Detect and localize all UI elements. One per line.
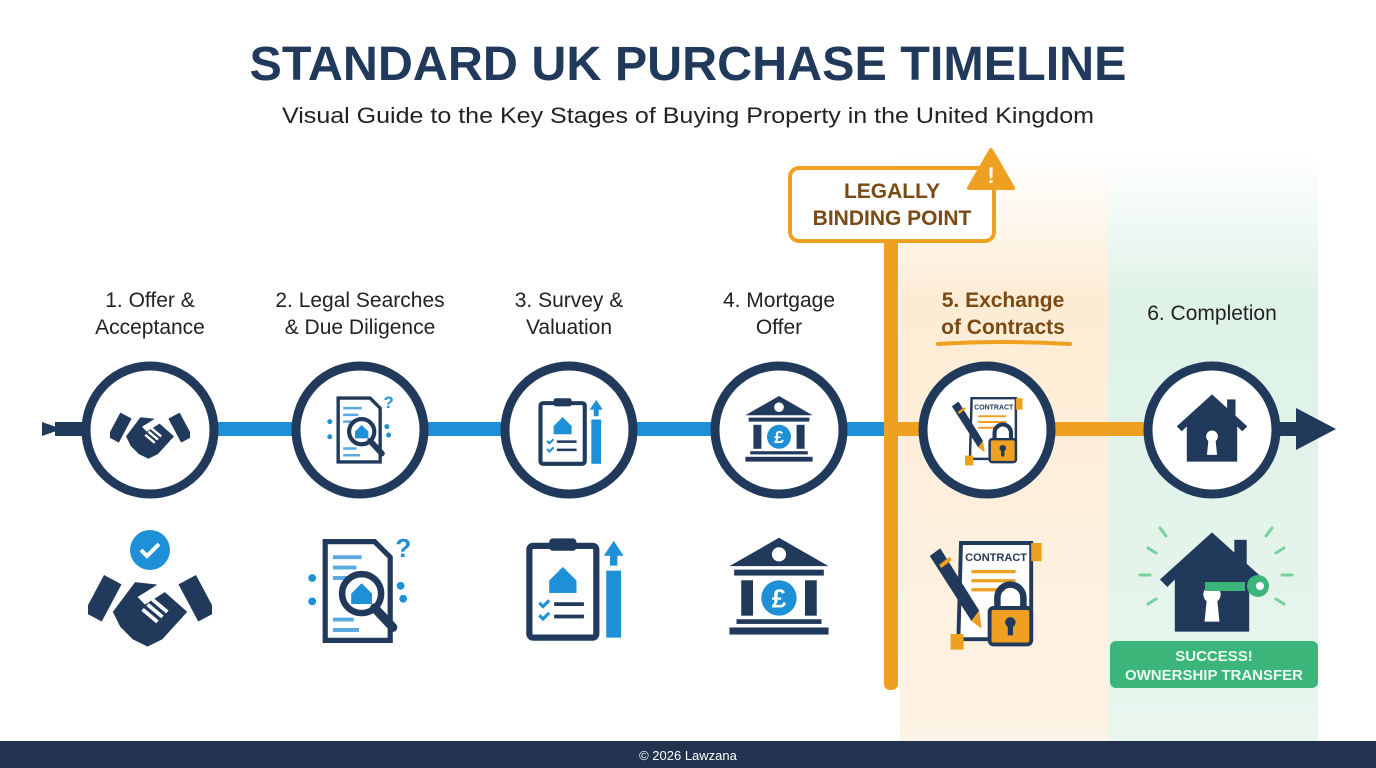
step 4 (715, 289, 843, 635)
step 3 (505, 289, 633, 638)
callout: legally binding point: LEGALLY (844, 180, 940, 203)
icon: warning: ! (987, 163, 995, 188)
subtitle: Visual Guide to the Key Stages of Buying Property in the United Kingdom (282, 103, 1094, 128)
step 4: 4. Mortgage (723, 289, 835, 312)
step 5: of Contracts (941, 316, 1065, 339)
step 4: Offer (756, 316, 802, 339)
step 5: 5. Exchange (942, 289, 1064, 312)
footer (0, 741, 1376, 768)
step 2: 2. Legal Searches (275, 289, 445, 312)
icon: warning (969, 150, 1013, 188)
step 1 (84, 289, 216, 647)
callout: success (1110, 641, 1318, 688)
step 1: Acceptance (95, 316, 205, 339)
step 1: 1. Offer & (105, 289, 195, 312)
title: STANDARD UK PURCHASE TIMELINE (250, 38, 1126, 91)
step 3: Valuation (526, 316, 612, 339)
step 6: 6. Completion (1147, 302, 1277, 325)
step 3: 3. Survey & (515, 289, 623, 312)
timeline axis (42, 408, 1336, 450)
footer: © 2026 Lawzana (639, 748, 738, 763)
callout: success: SUCCESS! (1175, 648, 1253, 665)
step 2: & Due Diligence (285, 316, 435, 339)
callout: legally binding point: BINDING POINT (813, 207, 972, 230)
callout: legally binding point (790, 150, 1013, 241)
callout: success: OWNERSHIP TRANSFER (1125, 667, 1303, 684)
step 6 (1140, 302, 1292, 632)
step 2 (275, 289, 445, 640)
panel: completion highlight background (1108, 150, 1318, 742)
panel: exchange highlight background (900, 150, 1108, 742)
legally binding line (884, 238, 898, 690)
step 5 (923, 289, 1070, 650)
